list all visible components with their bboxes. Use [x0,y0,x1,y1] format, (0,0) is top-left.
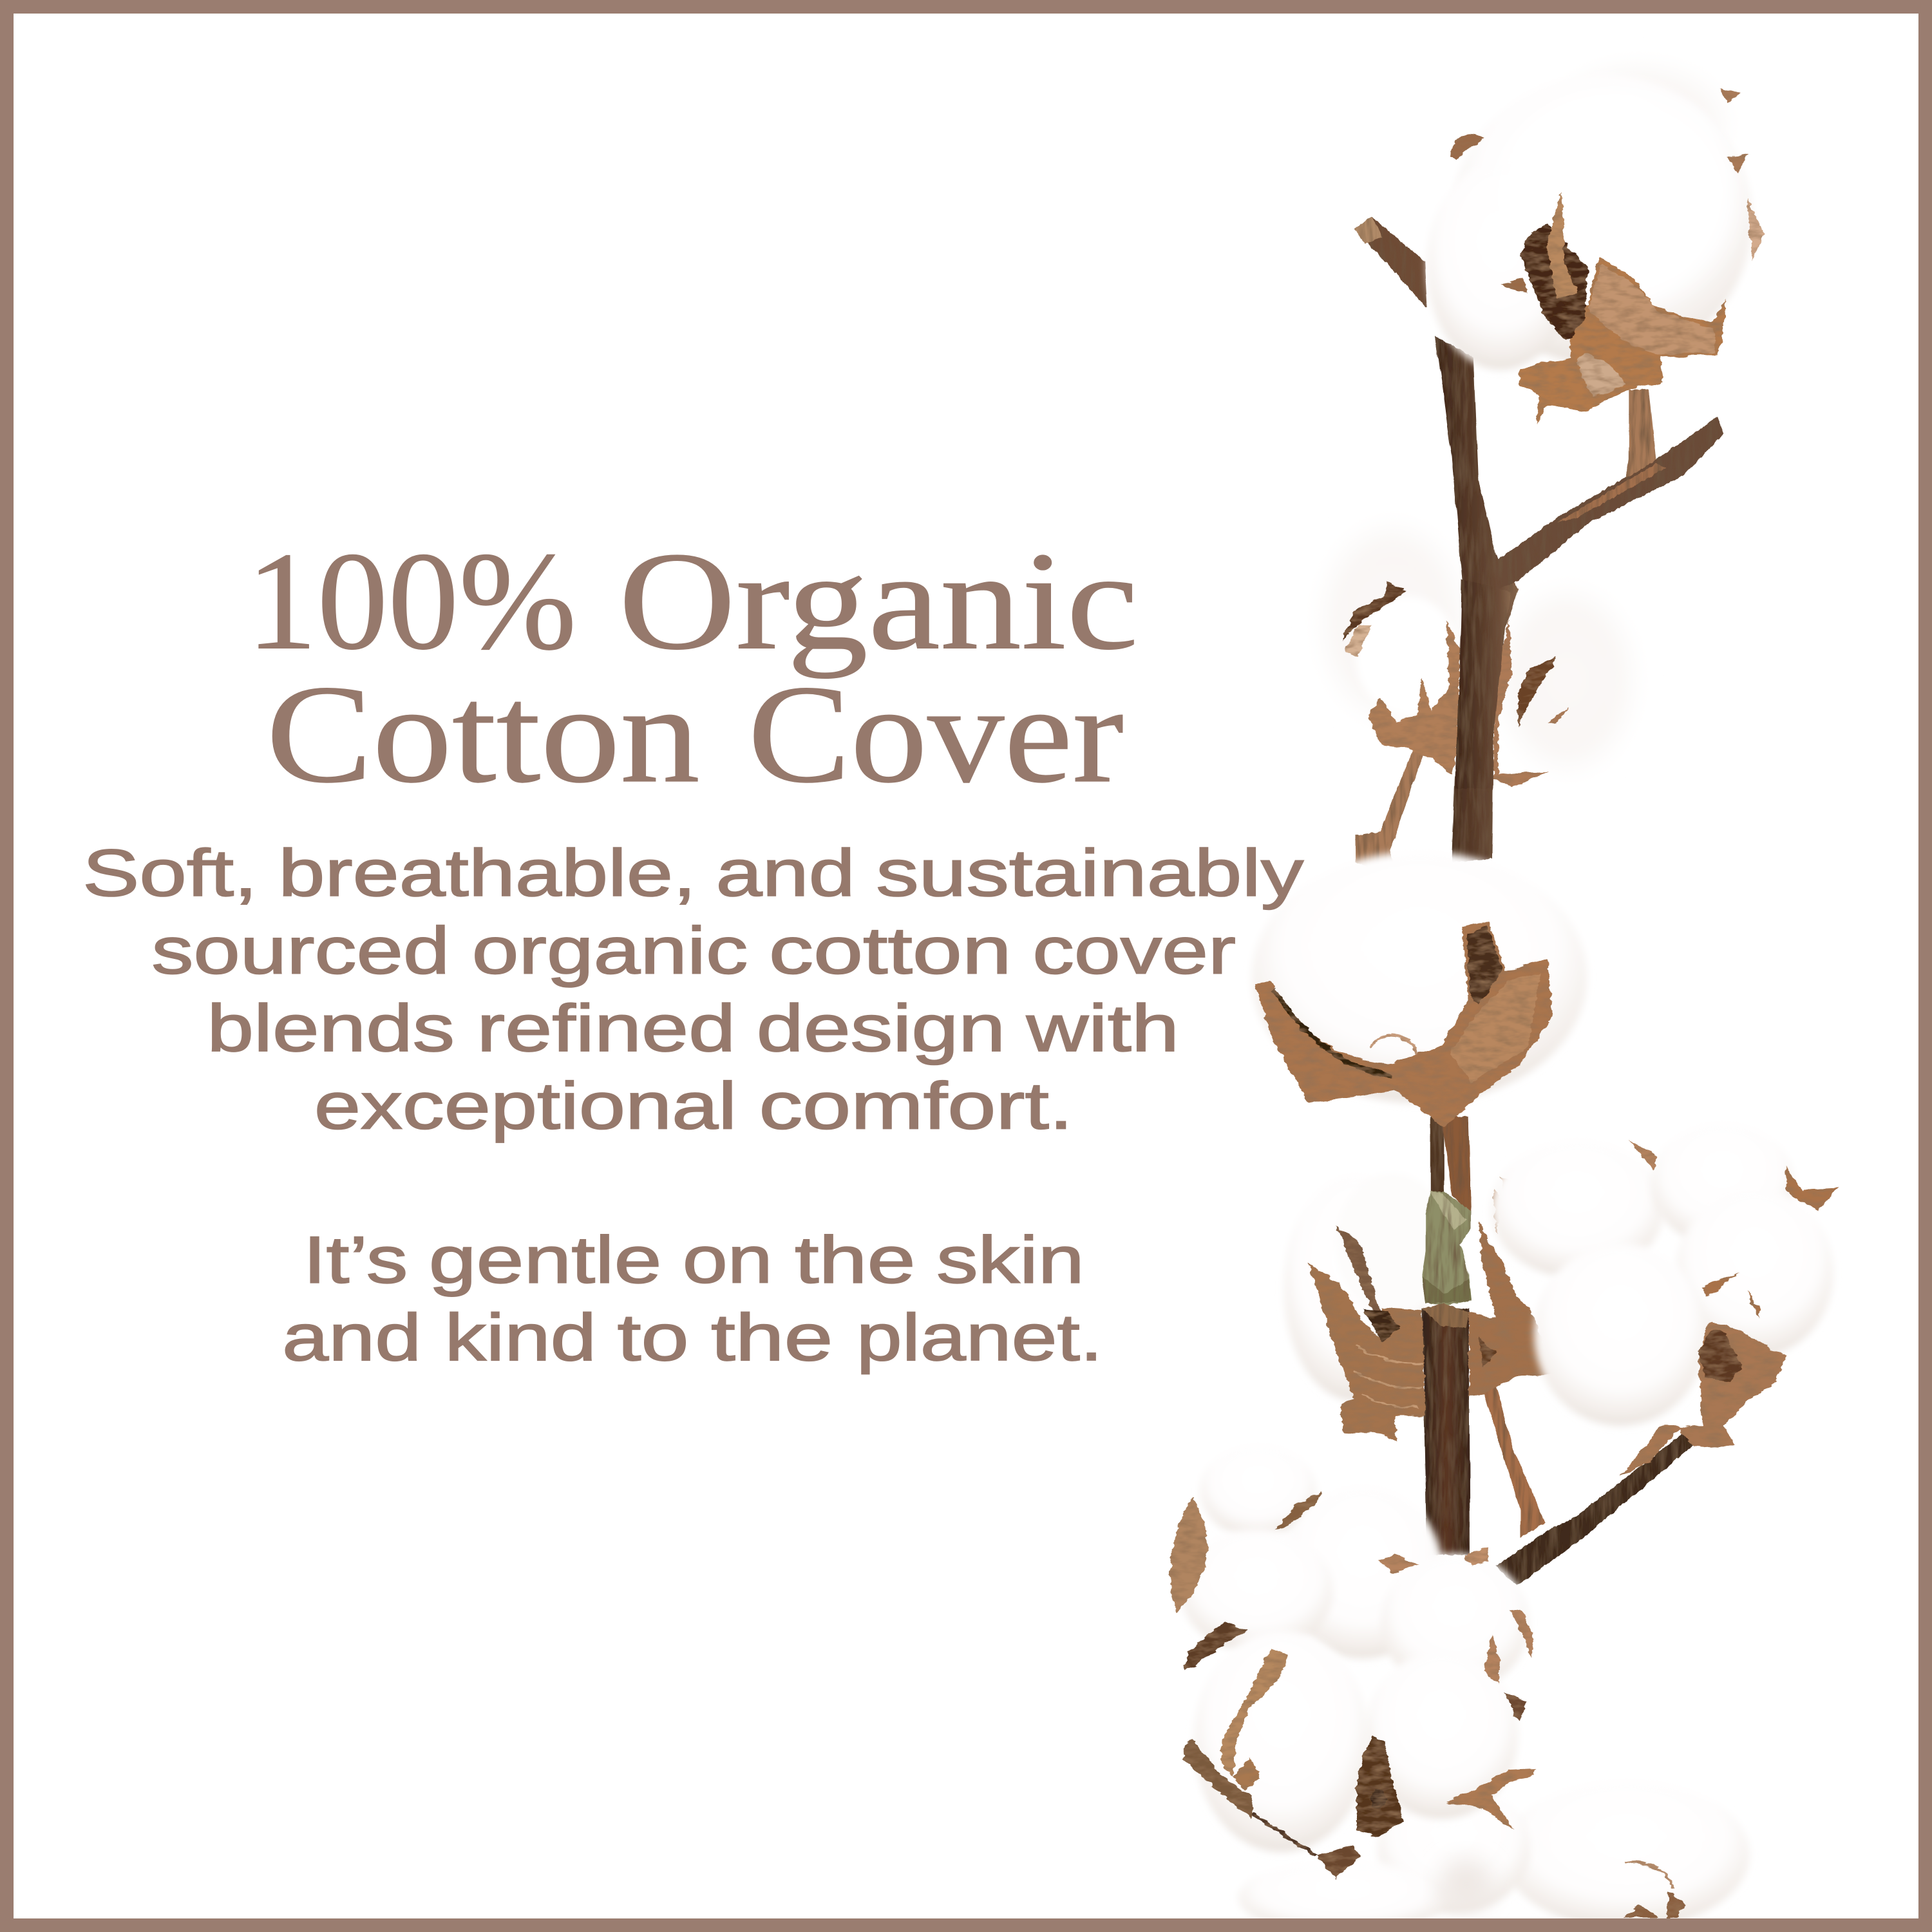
stem knot [1422,1191,1471,1328]
husk: lower right bolls [1620,1140,1837,1476]
cotton boll: bottom cluster [1171,1444,1750,1932]
body text: closing line: and [282,1300,421,1374]
body text: description: sourced [151,913,450,987]
body text: description: cotton [769,913,1012,987]
body text: description: sustainably [876,835,1304,910]
heading [247,524,1139,812]
heading: Cover [748,657,1124,812]
body text: closing line: gentle [429,1222,661,1297]
cotton boll: middle [1252,851,1587,1128]
body text: description: refined [477,990,735,1065]
body text: description: design [757,990,1005,1065]
husk: bottom cluster details [1171,1492,1685,1917]
body text: description [82,835,1304,1143]
main stem and branches [1354,217,1724,1586]
body text: description: organic [472,913,748,987]
soft cotton haze behind the stem [1284,518,1639,1401]
cotton boll: top [1427,62,1765,425]
body text: description: breathable, [278,835,696,910]
body text: description: blends [207,990,455,1065]
body text: description: with [1025,990,1179,1065]
husk: right of stem [1469,1177,1553,1396]
husk: middle boll [1255,922,1553,1128]
cotton bolls: lower right [1491,1122,1837,1476]
body text: closing line: planet. [857,1300,1103,1374]
body text: description: comfort. [759,1068,1073,1143]
body text: closing line: the [711,1300,833,1374]
body text: closing line: the [795,1222,916,1297]
upper stem overlay [1455,579,1511,788]
heading: Cotton [266,657,700,812]
cotton branch photo illustration [1171,62,1837,1932]
heading: 100% [247,524,576,679]
body text: description: cover [1032,913,1236,987]
husk: top boll [1450,89,1765,425]
body text: closing line: skin [936,1222,1084,1297]
body text: closing line: kind [445,1300,596,1374]
husks: upper pair [1342,582,1569,788]
body text: description: Soft, [82,835,258,910]
body text: closing line: to [618,1300,689,1374]
body text: description: and [716,835,855,910]
husk: cup behind cluster [1316,1846,1360,1879]
body text: closing line [282,1222,1103,1374]
body text: description: exceptional [314,1068,737,1143]
heading: Organic [618,524,1139,679]
body text: closing line: It’s [303,1222,408,1297]
husk: lower left of stem [1309,1226,1426,1442]
body text: closing line: on [683,1222,773,1297]
